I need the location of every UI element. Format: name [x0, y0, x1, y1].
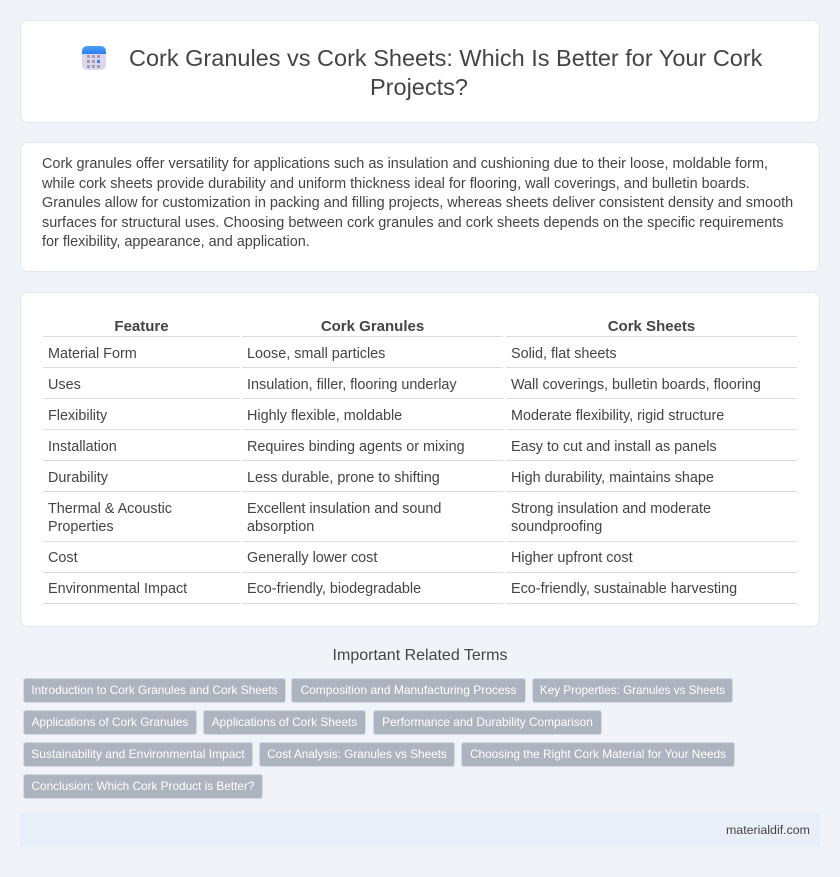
row: Thermal and Acoustic Properties: Thermal & Acoustic	[48, 501, 172, 517]
text block: summary	[42, 156, 793, 250]
tag: Applications of Cork Granules	[32, 715, 188, 729]
panel: comparison table: Loose, small particles	[247, 346, 385, 362]
panel: comparison table: Eco-friendly, biodegradable	[247, 581, 421, 597]
panel: comparison table: Highly flexible, moldable	[247, 408, 402, 424]
panel: comparison table: absorption	[247, 519, 314, 535]
text block: summary: Granules allow for customization in packing and filling projects, whereas sheets deliver consistent density and smooth	[42, 195, 793, 211]
tag: Performance and Durability Comparison	[382, 715, 593, 729]
tag	[532, 678, 733, 703]
tag	[291, 678, 526, 703]
tag: Conclusion: Which Cork Product is Better?	[32, 779, 254, 793]
title: Cork Granules vs Cork Sheets: Which Is Better for Your Cork	[129, 45, 762, 71]
tag: Key Properties: Granules vs Sheets	[540, 684, 725, 697]
panel: comparison table: Higher upfront cost	[511, 550, 633, 566]
tag	[373, 710, 602, 735]
title: Projects?	[370, 74, 468, 100]
panel: introduction text	[20, 142, 820, 272]
row: Durability: Durability	[48, 470, 108, 486]
heading: related terms: Important Related Terms	[333, 647, 507, 664]
tag	[23, 710, 197, 735]
tag: Composition and Manufacturing Process	[300, 683, 517, 697]
text block: summary: Cork granules offer versatility for applications such as insulation and cushioning due to their loose, moldable form,	[42, 156, 768, 172]
row: Material Form: Material Form	[48, 346, 137, 362]
panel: comparison table: soundproofing	[511, 519, 602, 535]
row: Thermal and Acoustic Properties: Properties	[48, 519, 114, 535]
row: Uses: Uses	[48, 377, 81, 393]
tag	[259, 742, 455, 767]
panel: comparison table: Wall coverings, bulletin boards, flooring	[511, 377, 761, 393]
panel: comparison table	[20, 292, 820, 627]
tag	[23, 774, 263, 799]
tag: Cost Analysis: Granules vs Sheets	[267, 748, 447, 761]
row: Environmental Impact: Environmental Impact	[48, 581, 187, 597]
table header: Cork Granules: Cork Granules	[321, 318, 424, 335]
text block: summary: for flexibility, appearance, and application.	[42, 234, 310, 250]
tag	[23, 742, 253, 767]
panel: comparison table: Insulation, filler, flooring underlay	[247, 377, 457, 393]
tag	[461, 742, 735, 767]
tag: Sustainability and Environmental Impact	[31, 747, 245, 761]
panel: comparison table: Requires binding agents or mixing	[247, 439, 465, 455]
panel: comparison table: Generally lower cost	[247, 550, 377, 566]
panel: comparison table: Strong insulation and moderate	[511, 501, 711, 517]
row: Thermal and Acoustic Properties	[48, 501, 172, 535]
row: Flexibility: Flexibility	[48, 408, 107, 424]
footer source text: materialdif.com	[726, 823, 810, 837]
panel: title header	[20, 20, 820, 123]
tag	[203, 710, 366, 735]
footer bar	[20, 813, 820, 847]
text block: summary: surfaces for structural uses. Choosing between cork granules and cork sheets depends on the specific requirements	[42, 214, 784, 230]
table header: Feature: Feature	[114, 318, 169, 335]
title	[129, 45, 762, 100]
tag: Introduction to Cork Granules and Cork Sheets	[31, 683, 278, 697]
panel: comparison table: Eco-friendly, sustainable harvesting	[511, 581, 737, 597]
panel: comparison table: Solid, flat sheets	[511, 346, 617, 362]
panel: comparison table: Easy to cut and install as panels	[511, 439, 717, 455]
tags: related terms	[23, 678, 735, 799]
icon: calendar	[82, 46, 106, 70]
table header: Cork Sheets: Cork Sheets	[608, 318, 695, 335]
tag	[23, 678, 286, 703]
tag: Choosing the Right Cork Material for Your Needs	[470, 747, 726, 761]
panel: comparison table: Moderate flexibility, rigid structure	[511, 408, 724, 424]
panel: comparison table: High durability, maintains shape	[511, 470, 714, 486]
text block: summary: while cork sheets provide durability and uniform thickness ideal for flooring, wall coverings, and bulletin boards.	[42, 176, 750, 192]
panel: comparison table: Less durable, prone to shifting	[247, 470, 440, 486]
row: Cost: Cost	[48, 550, 78, 566]
tag: Applications of Cork Sheets	[212, 715, 357, 729]
row: Installation: Installation	[48, 439, 117, 455]
panel: comparison table: Excellent insulation and sound	[247, 501, 441, 517]
